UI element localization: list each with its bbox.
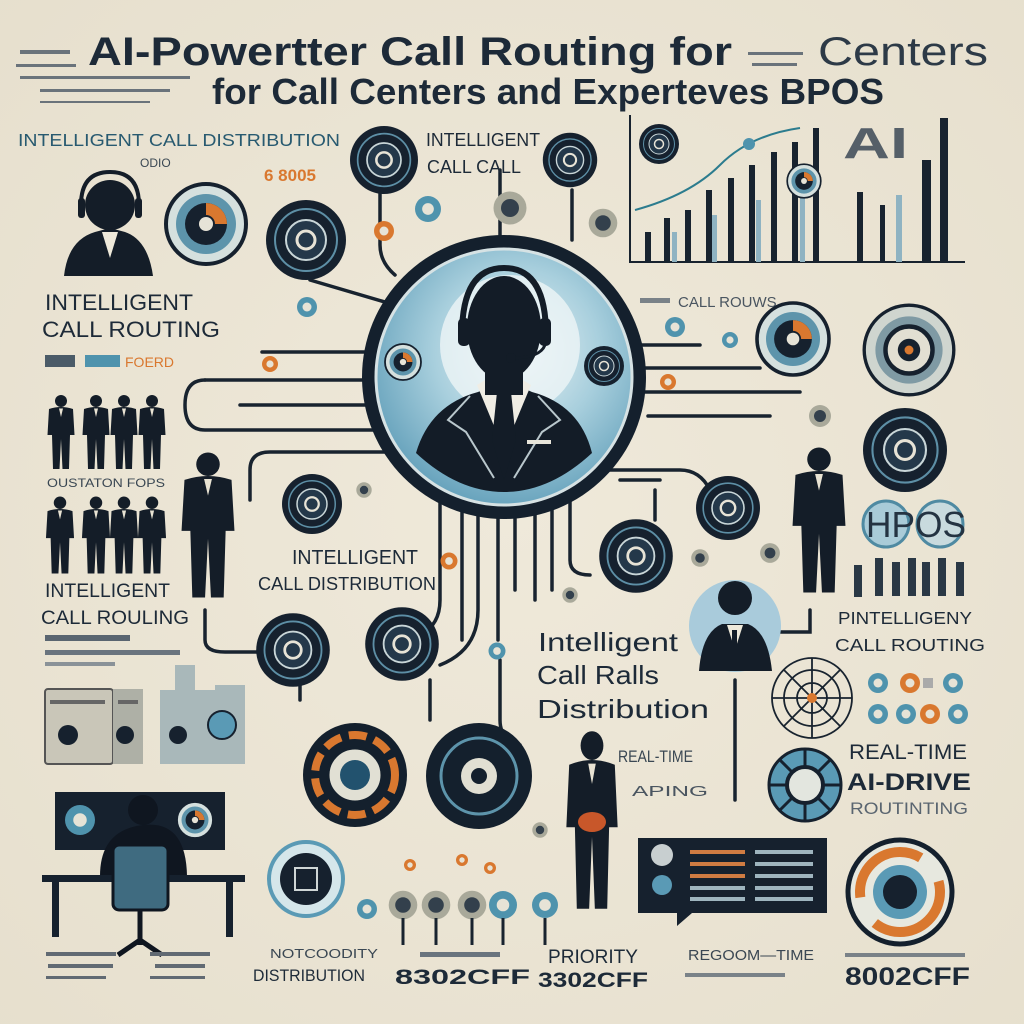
bottom label: distribution: NOTCOODITY xyxy=(270,946,378,961)
standing figure left xyxy=(182,452,234,598)
bottom label: priority: 3302CFF xyxy=(538,969,648,992)
bottom node row xyxy=(357,822,558,945)
agent bust xyxy=(689,580,781,672)
standing figure right xyxy=(793,447,845,593)
center label: intelligent call ralls distribution xyxy=(537,627,709,724)
heading: intelligent call distribution: INTELLIGENT CALL DISTRIBUTION xyxy=(18,130,340,150)
title: Centers xyxy=(818,30,988,74)
heading: intelligent call distribution: ODIO xyxy=(140,156,171,170)
real-time mapping label: APING xyxy=(632,783,708,800)
center-left icons and label: INTELLIGENT xyxy=(292,547,418,569)
status dots grid xyxy=(868,673,968,724)
right icons xyxy=(660,303,954,492)
heading: real-time ai-drive routing xyxy=(847,741,971,818)
heading: intelligent call distribution xyxy=(18,130,340,185)
bottom label: code one xyxy=(395,952,530,989)
left heading: intelligent call routing: INTELLIGENT xyxy=(45,290,193,315)
right heading: intelligeny call routing xyxy=(835,608,985,655)
bottom label: distribution: DISTRIBUTION xyxy=(253,967,365,985)
bottle row xyxy=(854,558,964,597)
bottom-left round icon xyxy=(269,842,343,916)
right heading: intelligeny call routing: CALL ROUTING xyxy=(835,635,985,655)
right heading: intelligeny call routing: PINTELLIGENY xyxy=(838,608,972,628)
bar chart: AI xyxy=(843,119,908,168)
real-time mapping label: REAL-TIME xyxy=(618,747,693,766)
title xyxy=(88,30,988,112)
bottom label: code one: 8302CFF xyxy=(395,966,530,989)
standing figure bottom xyxy=(566,731,618,909)
center label: intelligent call ralls distribution: Distribution xyxy=(537,694,709,724)
speech bubble dashboard xyxy=(638,838,827,926)
panels: server boxes xyxy=(45,665,245,764)
central agent emblem xyxy=(362,235,646,519)
people row two xyxy=(46,497,166,573)
right label: call routing: CALL ROUWS xyxy=(678,294,777,311)
heading: real-time ai-drive routing: REAL-TIME xyxy=(849,741,967,764)
bottom captions left xyxy=(46,952,210,979)
real-time mapping label xyxy=(618,747,708,800)
large dial bottom right xyxy=(848,840,952,944)
radar icon xyxy=(772,658,852,738)
heading: real-time ai-drive routing: ROUTINTING xyxy=(850,799,968,818)
center-left icons and label: CALL DISTRIBUTION xyxy=(258,574,436,594)
heading: intelligent call call xyxy=(426,130,540,177)
small caption: OUSTATON FOPS xyxy=(47,476,165,490)
title: for Call Centers and Experteves BPOS xyxy=(212,71,884,112)
left heading: intelligent call rouling xyxy=(41,581,189,666)
bottom label: priority: PRIORITY xyxy=(548,947,638,968)
heading: intelligent call distribution: 6 8005 xyxy=(264,166,316,185)
left heading: intelligent call rouling: CALL ROULING xyxy=(41,608,189,629)
left heading: intelligent call routing xyxy=(42,290,220,370)
bottom label: code two: 8002CFF xyxy=(845,963,970,991)
center-left icons and label xyxy=(256,474,506,687)
wiring network xyxy=(185,170,810,800)
people row one xyxy=(48,395,166,469)
desk workstation xyxy=(42,792,245,955)
left heading: intelligent call routing: FOERD xyxy=(125,354,174,370)
left heading: intelligent call routing: CALL ROUTING xyxy=(42,317,220,342)
middle bottom dials xyxy=(303,723,532,829)
heading: intelligent call call: INTELLIGENT xyxy=(426,130,540,150)
bottom label: code two xyxy=(845,953,970,991)
bottom label: priority xyxy=(538,947,648,992)
header side notes xyxy=(16,50,803,103)
top-left agent icon xyxy=(64,172,153,276)
bottom label: real-time: REGOOM—TIME xyxy=(688,947,814,964)
bottom label: distribution xyxy=(253,946,378,985)
center-right icons xyxy=(562,476,780,603)
gear segmented dial xyxy=(769,749,841,821)
title: AI-Powertter Call Routing for xyxy=(88,30,732,74)
center label: intelligent call ralls distribution: Intelligent xyxy=(538,627,679,657)
left heading: intelligent call rouling: INTELLIGENT xyxy=(45,581,170,602)
center label: intelligent call ralls distribution: Call Ralls xyxy=(537,660,659,690)
BPOS label: HPOS xyxy=(866,504,966,545)
top icons xyxy=(166,126,617,372)
heading: intelligent call call: CALL CALL xyxy=(427,157,521,177)
heading: real-time ai-drive routing: AI-DRIVE xyxy=(847,769,971,796)
bottom label: real-time xyxy=(685,947,814,977)
bar chart xyxy=(630,115,965,262)
